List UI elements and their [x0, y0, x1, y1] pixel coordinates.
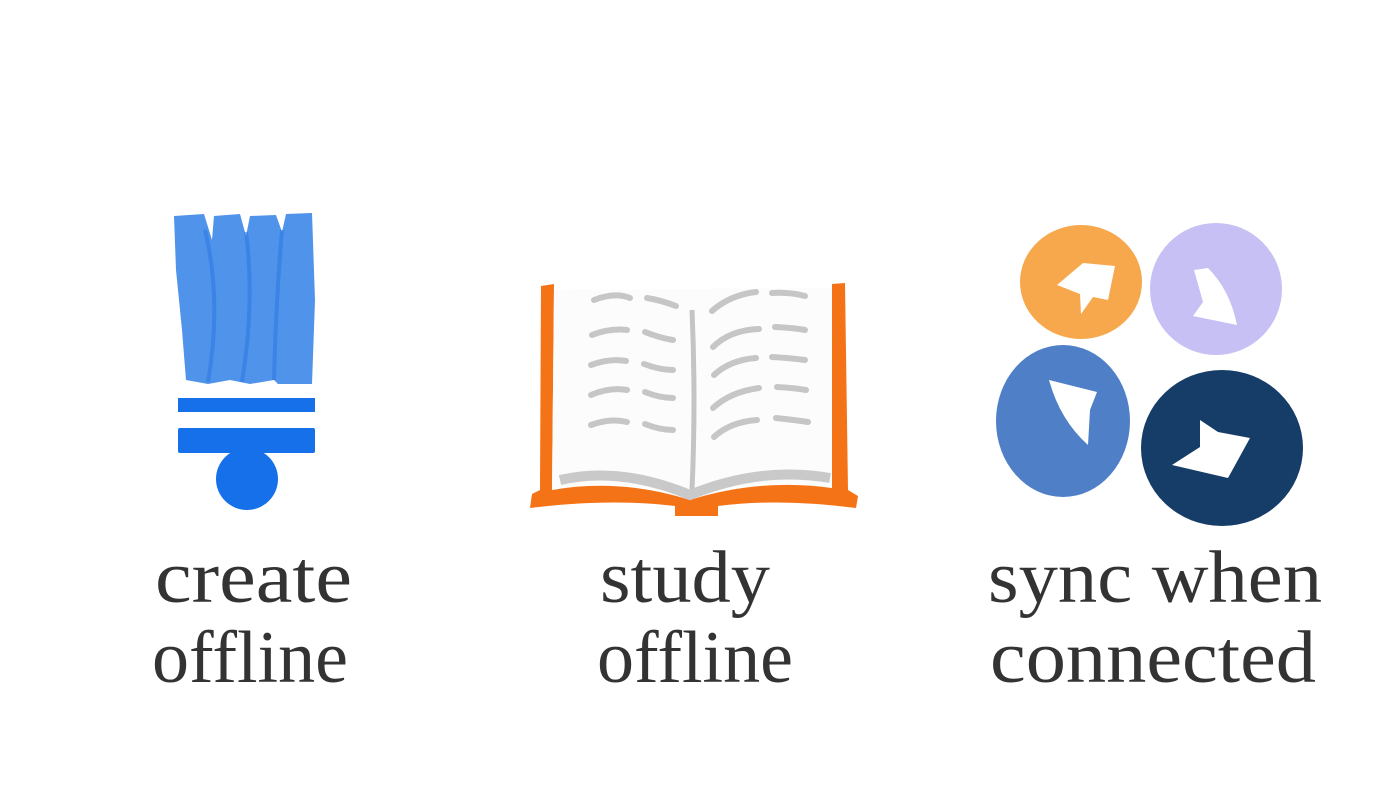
lavender circle — [1150, 223, 1282, 355]
orange circle — [1020, 225, 1142, 339]
navy circle — [1141, 370, 1303, 526]
blue circle — [996, 345, 1130, 497]
label: sync when connected: connected — [990, 617, 1316, 699]
label: create offline — [152, 537, 352, 699]
label: study offline — [597, 537, 793, 699]
label: sync when connected: sync when — [988, 537, 1322, 619]
icon: sync circles — [996, 223, 1303, 526]
label: study offline: offline — [597, 617, 793, 699]
label: create offline: offline — [152, 617, 348, 699]
label: sync when connected — [988, 537, 1322, 699]
label: study offline: study — [600, 537, 770, 619]
icon: paint brush — [174, 213, 315, 510]
icon: open book — [530, 283, 858, 516]
label: create offline: create — [155, 537, 352, 619]
